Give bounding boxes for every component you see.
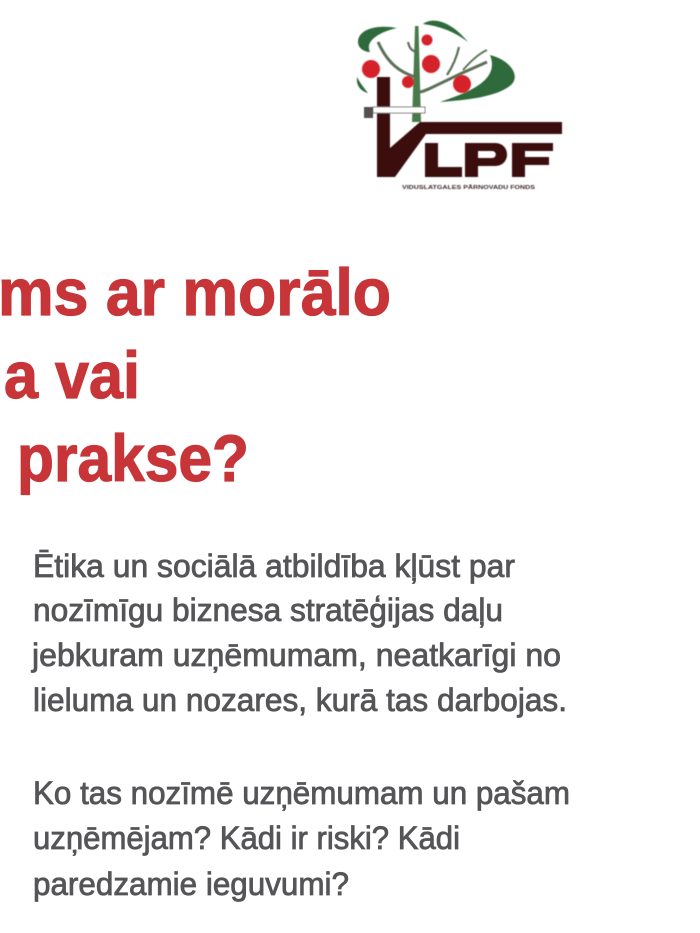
- text block: intro paragraph: nozīmīgu biznesa stratēģijas daļu: [33, 592, 503, 628]
- text block: questions paragraph: Ko tas nozīmē uzņēmumam un pašam: [33, 775, 570, 811]
- text block: intro paragraph: lieluma un nozares, kurā tas darbojas.: [33, 682, 567, 718]
- text block: questions paragraph: uzņēmējam? Kādi ir riski? Kādi: [33, 820, 460, 856]
- text block: intro paragraph: [31, 548, 567, 718]
- icon: tree trunk and branches: [378, 26, 487, 122]
- icon: green leaves: [357, 21, 515, 102]
- title: [0, 255, 391, 495]
- text block: intro paragraph: Ētika un sociālā atbildība kļūst par: [33, 548, 515, 584]
- text block: questions paragraph: [33, 775, 570, 902]
- icon: small seal: [364, 107, 373, 118]
- title: ms ar morālo: [0, 255, 391, 329]
- icon: red apples: [362, 34, 471, 93]
- icon: VLPF monogram: [377, 77, 562, 177]
- text block: questions paragraph: paredzamie ieguvumi?: [33, 866, 349, 902]
- text block: intro paragraph: jebkuram uzņēmumam, neatkarīgi no: [31, 637, 561, 673]
- title: prakse?: [17, 421, 249, 495]
- logo: VLPF tree: [357, 21, 562, 191]
- title: a vai: [4, 338, 140, 412]
- logo caption: VIDUSLATGALES PĀRNOVADU FONDS: [402, 184, 536, 191]
- icon: white crossbar: [373, 107, 425, 113]
